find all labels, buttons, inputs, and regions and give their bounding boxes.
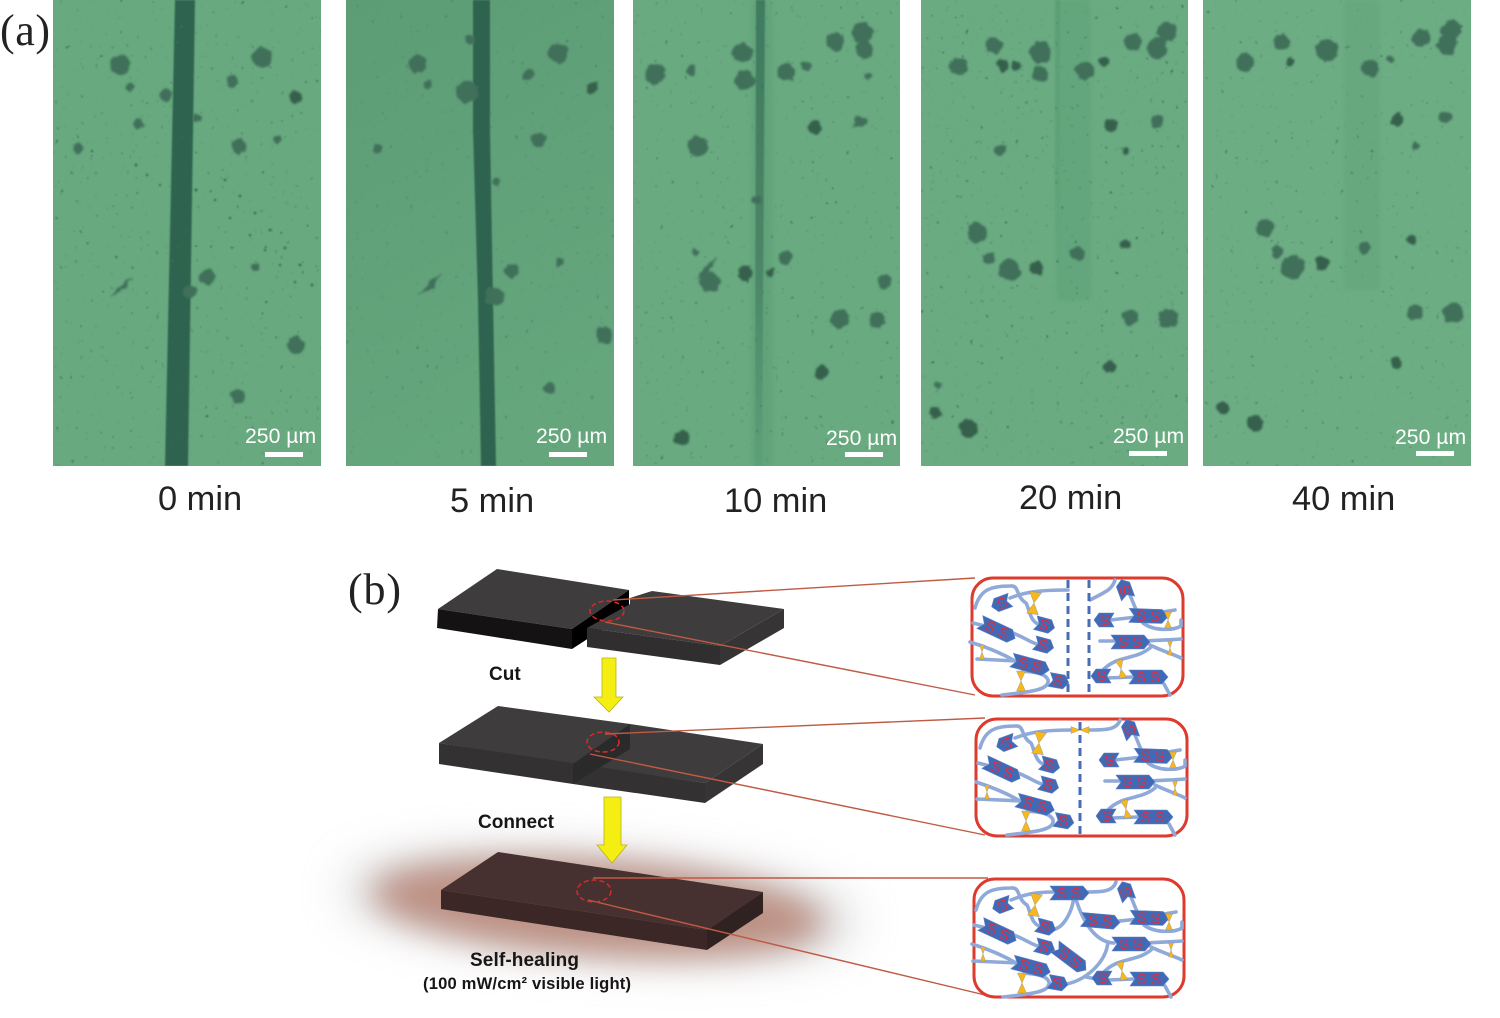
network box: healed state: S [1117, 884, 1136, 899]
panel label (a): (a) [0, 6, 50, 55]
label: Self-healing: Self-healing [470, 950, 579, 971]
network box: cut state: S [1136, 608, 1146, 625]
network box: cut state: S [1016, 654, 1030, 673]
network box: healed state: S [1055, 944, 1073, 964]
network box: healed state: S [1137, 971, 1147, 988]
network box: connected state: S [1141, 809, 1151, 826]
micrograph: 20 min [921, 0, 1188, 466]
micrograph: 40 min [1203, 0, 1471, 466]
network box: cut state: S [1037, 616, 1051, 635]
network box: cut state: S [1097, 667, 1107, 684]
network box: connected state: S [1035, 798, 1049, 817]
label: light condition: (100 mW/cm² visible light) [423, 974, 631, 993]
network box: connected state: S [1121, 722, 1140, 737]
network box: healed state: S [1038, 918, 1052, 937]
network box: cut state: S [1150, 669, 1160, 686]
network box: healed state: S [996, 926, 1012, 945]
network box: cut state: S [995, 624, 1011, 643]
network box: cut state: S [1150, 608, 1160, 625]
network box: connected state: S [1105, 751, 1115, 768]
network box: cut state [970, 577, 1183, 696]
panel label (b): (b) [348, 565, 401, 614]
time labels: 5 min [450, 482, 534, 520]
network box: connected state: S [1102, 807, 1112, 824]
time labels [158, 479, 1395, 520]
network box: healed state: S [1119, 936, 1129, 953]
network box: healed state: S [1066, 953, 1084, 972]
network box: healed state: S [1057, 885, 1067, 902]
network box: connected state: S [1137, 774, 1147, 791]
network box: cut state: S [1030, 658, 1044, 677]
scale bars and scale text: 250 µm [245, 425, 316, 448]
network box: healed state: S [1031, 960, 1045, 979]
network box: cut state: S [1100, 611, 1110, 628]
network box: connected state: S [1057, 812, 1069, 831]
network box: healed state: S [1151, 971, 1161, 988]
network box: healed state: S [1133, 936, 1143, 953]
scale bars and scale text: 250 µm [826, 427, 897, 450]
network box: healed state: S [983, 920, 1000, 939]
slab: healed, irradiated [441, 852, 763, 950]
network box: connected state: S [1123, 774, 1133, 791]
scale bars and scale text [245, 425, 1466, 457]
network box: healed state: S [1098, 969, 1108, 986]
network box: connected state: S [1000, 764, 1016, 783]
network box: cut state: S [982, 618, 999, 637]
network box: healed state: S [1071, 885, 1081, 902]
micrograph: 5 min [346, 0, 614, 466]
network box: healed state: S [1137, 910, 1147, 927]
network box: connected state [976, 717, 1187, 839]
network box: healed state: S [1017, 956, 1031, 975]
network box: connected state: S [1141, 748, 1151, 765]
network box: healed state: S [1087, 912, 1099, 930]
micrograph: 10 min [633, 0, 900, 466]
network box: cut state: S [1036, 636, 1050, 655]
network box: cut state: S [994, 593, 1009, 612]
network box: healed state: S [1037, 938, 1051, 957]
network box: cut state: S [1116, 582, 1135, 597]
scale bars and scale text: 250 µm [536, 425, 607, 448]
network box: healed state [972, 879, 1184, 997]
network box: cut state: S [1118, 634, 1128, 651]
arrow: connect to self-healing [597, 797, 627, 863]
network box: cut state: S [1132, 634, 1142, 651]
network box: cut state: S [1052, 672, 1064, 691]
network box: healed state: S [1151, 910, 1161, 927]
label: Cut: Cut [489, 664, 521, 685]
scale bars and scale text: 250 µm [1395, 426, 1466, 449]
slab: connected [439, 706, 763, 803]
slab: cut, left piece [437, 569, 629, 649]
network box: connected state: S [1042, 756, 1056, 775]
network box: connected state: S [1041, 776, 1055, 795]
network box: healed state: S [1101, 913, 1113, 931]
network box: connected state: S [1155, 748, 1165, 765]
network box: healed state: S [995, 895, 1010, 914]
dashed selection circles [577, 601, 624, 902]
label: Connect: Connect [478, 812, 555, 833]
arrow: cut to connect [594, 658, 623, 712]
network box: cut state: S [1136, 669, 1146, 686]
network box: connected state: S [1155, 809, 1165, 826]
time labels: 20 min [1019, 479, 1122, 517]
zoom connector lines [588, 578, 988, 995]
slab: cut, right piece [587, 591, 784, 665]
scale bars and scale text: 250 µm [1113, 425, 1184, 448]
network box: connected state: S [1021, 794, 1035, 813]
time labels: 10 min [724, 482, 827, 520]
network box: connected state: S [999, 733, 1014, 752]
network box: healed state: S [1051, 974, 1063, 993]
time labels: 0 min [158, 480, 242, 518]
time labels: 40 min [1292, 480, 1395, 518]
network box: connected state: S [987, 758, 1004, 777]
illumination glow [342, 840, 858, 972]
micrograph: 0 min [53, 0, 321, 466]
